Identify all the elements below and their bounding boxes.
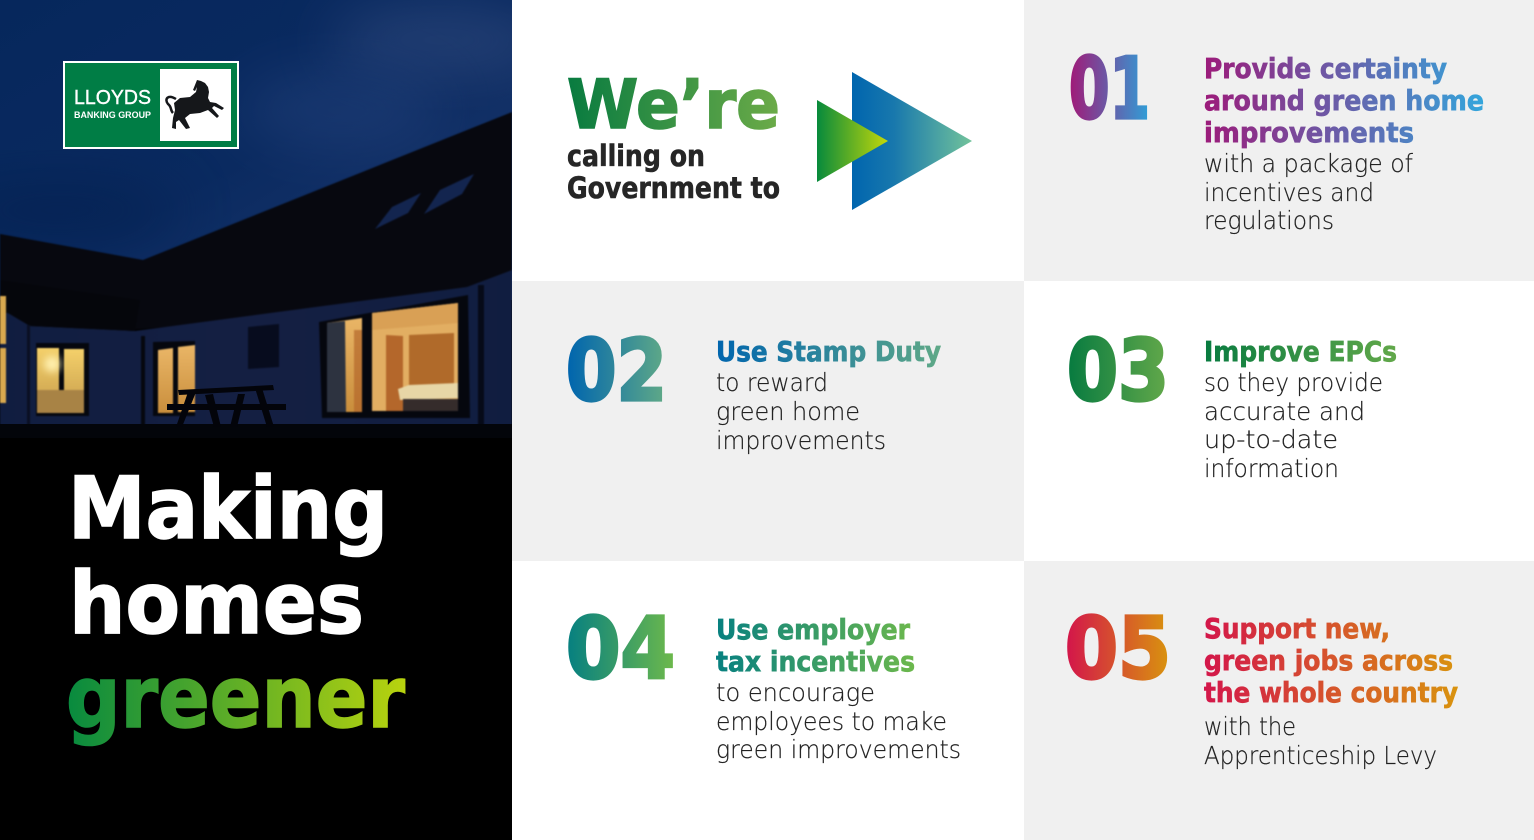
panel: 04: [566, 600, 961, 764]
panel: 03: information: [1204, 454, 1339, 483]
panel: 03: up-to-date: [1204, 425, 1338, 454]
heading: We're calling on Government to: We’re: [567, 66, 780, 145]
panel: 03: Improve EPCs: [1204, 335, 1397, 368]
logo: Lloyds Banking Group: BANKING GROUP: [74, 110, 152, 121]
title: greener: [66, 648, 406, 748]
panel: 01: improvements: [1204, 116, 1414, 149]
panel: 01: regulations: [1204, 206, 1334, 235]
panel: 04: green improvements: [716, 735, 961, 764]
panel: 02: [512, 281, 1024, 561]
panel: 02: green home: [716, 397, 860, 426]
panel: 03: so they provide: [1204, 368, 1383, 397]
heading: We're calling on Government to: Government to: [567, 171, 780, 205]
panel: 02: improvements: [716, 426, 886, 455]
icon: double arrow: [817, 72, 972, 210]
title: [66, 459, 406, 748]
panel: 05: the whole country: [1204, 676, 1458, 709]
panel: 05: 05: [1065, 600, 1171, 699]
panel: 04: Use employer: [716, 613, 910, 646]
title: Making: [68, 459, 388, 559]
title: homes: [69, 554, 364, 654]
panel: 05: green jobs across: [1204, 644, 1453, 677]
panel: 03: [1067, 322, 1397, 483]
panel: 04: tax incentives: [716, 645, 915, 678]
panel: 02: 02: [566, 322, 667, 421]
panel: 02: to reward: [716, 368, 828, 397]
panel: 01: with a package of: [1204, 149, 1413, 178]
icon: black horse: [166, 80, 224, 129]
picnic table silhouette: [167, 385, 286, 427]
panel: 05: with the: [1204, 712, 1296, 741]
panel: 04: employees to make: [716, 707, 947, 736]
heading: We're calling on Government to: [567, 66, 780, 205]
panel: 03: accurate and: [1204, 397, 1365, 426]
panel: 01: incentives and: [1204, 178, 1374, 207]
panel: 01: [1024, 0, 1534, 281]
logo: Lloyds Banking Group: LLOYDS: [74, 87, 151, 109]
panel: photo of house at night: [0, 0, 550, 840]
panel: 02: Use Stamp Duty: [716, 335, 941, 368]
logo: Lloyds Banking Group: [63, 61, 239, 149]
panel: 01: 01: [1069, 40, 1150, 139]
panel: 01: around green home: [1204, 84, 1484, 117]
panel: 01: Provide certainty: [1204, 52, 1447, 85]
panel: 04: to encourage: [716, 678, 875, 707]
panel: 05: Support new,: [1204, 612, 1390, 645]
panel: 04: 04: [566, 600, 675, 699]
panel: 05: Apprenticeship Levy: [1204, 741, 1437, 770]
panel: 03: 03: [1067, 322, 1169, 421]
heading: We're calling on Government to: calling on: [567, 139, 705, 173]
panel: 05: [1024, 561, 1534, 840]
